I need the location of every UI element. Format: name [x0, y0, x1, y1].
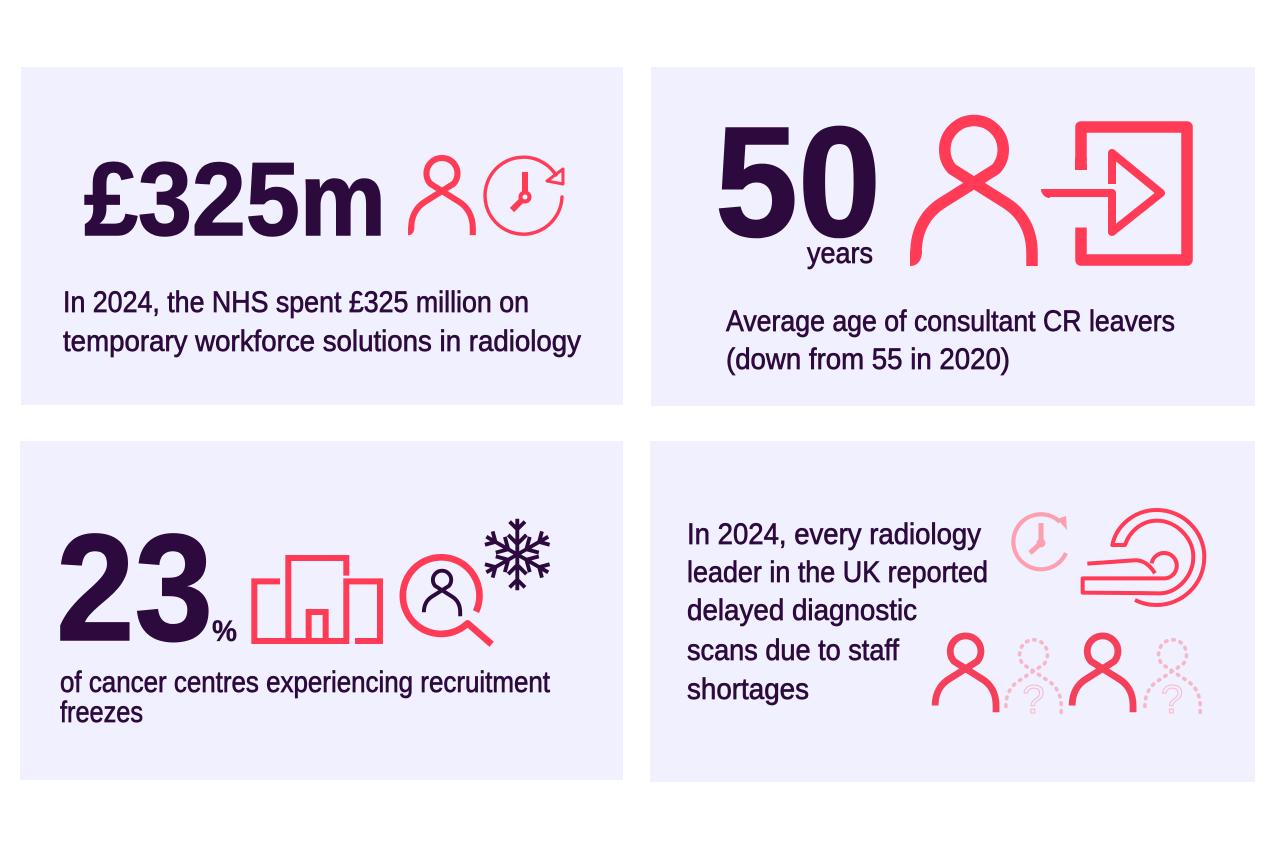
description: delayed diagnostic scans: scans due to staff	[687, 634, 900, 667]
description: delayed diagnostic scans: delayed diagnostic	[687, 594, 917, 627]
description: delayed diagnostic scans: leader in the UK reported	[687, 556, 988, 589]
description: leaver age: (down from 55 in 2020)	[726, 343, 1010, 376]
icon: magnifier with person	[403, 557, 492, 644]
icon: MRI scanner	[1083, 510, 1204, 605]
headline: 23%: %	[212, 615, 237, 648]
description: NHS spend: In 2024, the NHS spent £325 million on	[63, 286, 529, 319]
description: NHS spend	[63, 286, 581, 358]
icon: missing staff 1	[1006, 640, 1061, 722]
description: leaver age	[726, 305, 1175, 376]
icon: staff person 2	[1072, 636, 1133, 712]
description: cancer centres	[60, 666, 551, 729]
icon: hospital buildings	[254, 558, 380, 641]
icon: staff person 1	[935, 636, 996, 712]
description: delayed diagnostic scans: In 2024, every radiology	[687, 518, 981, 551]
icon: faded clock	[1013, 514, 1067, 569]
headline: 50 years: years	[807, 237, 873, 270]
headline: 23%: 23	[56, 503, 213, 673]
description: delayed diagnostic scans: shortages	[687, 673, 809, 706]
description: cancer centres: of cancer centres experiencing recruitment	[60, 666, 551, 699]
description: delayed diagnostic scans	[687, 518, 988, 706]
description: NHS spend: temporary workforce solutions in radiology	[63, 325, 581, 358]
icon: missing staff 2: ?	[1161, 678, 1183, 722]
description: cancer centres: freezes	[60, 696, 143, 729]
panel: temporary workforce spend	[21, 67, 623, 405]
icon: missing staff 2	[1145, 640, 1200, 722]
headline: 50 years: 50	[715, 95, 881, 270]
panel: consultant leaver age	[651, 67, 1255, 406]
icon: exit door with arrow	[1041, 127, 1187, 260]
panel: delayed scans	[650, 441, 1255, 782]
panel: recruitment freezes	[20, 441, 623, 780]
icon: person	[408, 158, 473, 235]
icon: missing staff 1: ?	[1022, 678, 1045, 722]
description: leaver age: Average age of consultant CR leavers	[726, 305, 1175, 338]
icon: clock with arrow	[485, 157, 563, 234]
icon: snowflake	[482, 519, 553, 590]
headline: £325m: £325m	[84, 142, 386, 258]
icon: person	[910, 120, 1032, 266]
